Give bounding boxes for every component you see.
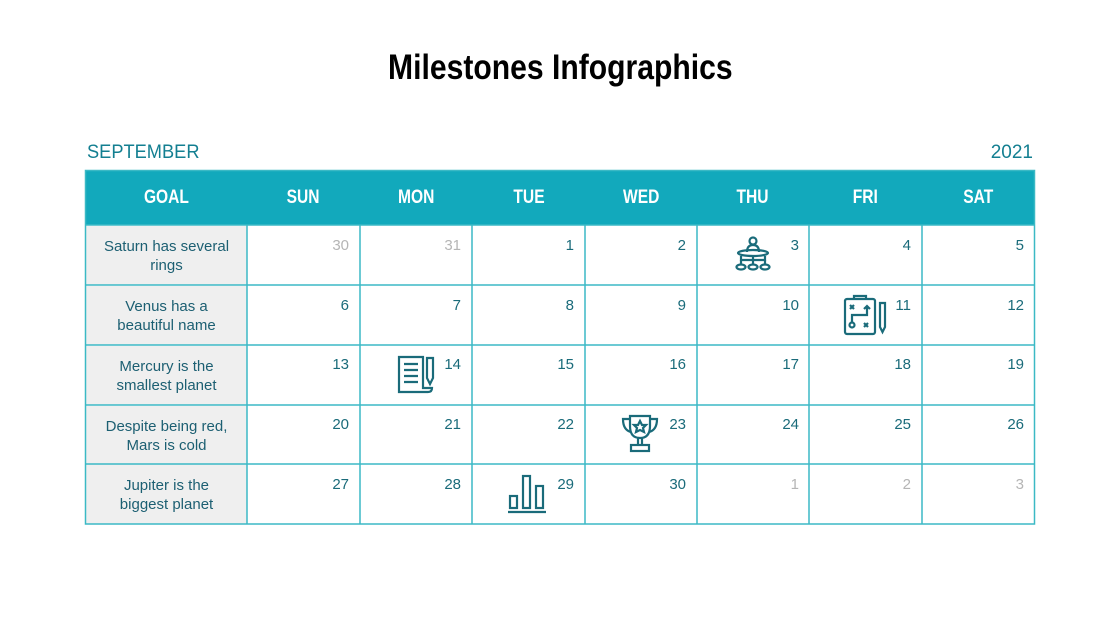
icon: network person xyxy=(735,236,771,271)
day numbers: 22 xyxy=(557,416,574,433)
goal cells: Saturn has several xyxy=(104,238,229,254)
icon: document with pen xyxy=(398,356,434,394)
day numbers: 18 xyxy=(894,356,911,373)
header labels: GOAL xyxy=(143,187,188,208)
header labels: THU xyxy=(737,187,769,208)
day numbers: 4 xyxy=(903,237,911,254)
icon: bar chart xyxy=(508,474,546,514)
goal cells xyxy=(86,226,246,523)
day numbers: 1 xyxy=(566,237,574,254)
goal cells: Mars is cold xyxy=(126,436,207,454)
day numbers: 12 xyxy=(1007,297,1024,314)
day numbers: 1 xyxy=(791,476,799,493)
day numbers: 23 xyxy=(669,416,686,433)
day numbers: 31 xyxy=(444,237,461,254)
header labels: SUN xyxy=(287,187,320,208)
day numbers: 14 xyxy=(444,356,461,373)
day numbers: 2 xyxy=(903,476,911,493)
goal cells: biggest planet xyxy=(120,496,213,512)
day numbers: 13 xyxy=(332,356,349,373)
goal cells: rings xyxy=(150,256,183,274)
day numbers: 9 xyxy=(678,297,686,314)
goal cells: Mercury is the xyxy=(119,358,214,374)
day numbers: 8 xyxy=(566,297,574,314)
year label: 2021 xyxy=(991,142,1033,163)
header labels: WED xyxy=(623,187,659,208)
day numbers: 3 xyxy=(791,237,799,254)
day numbers: 29 xyxy=(557,476,574,493)
header labels xyxy=(143,187,994,208)
day numbers: 15 xyxy=(557,356,574,373)
day numbers: 19 xyxy=(1007,356,1024,373)
day numbers: 6 xyxy=(341,297,349,314)
goal cells: Jupiter is the xyxy=(124,476,209,494)
header labels: MON xyxy=(398,187,434,208)
day numbers: 25 xyxy=(894,416,911,433)
day numbers: 7 xyxy=(453,297,461,314)
day numbers: 2 xyxy=(678,237,686,254)
day numbers: 28 xyxy=(444,476,461,493)
day numbers: 16 xyxy=(669,356,686,373)
goal cells: Despite being red, xyxy=(106,418,227,434)
icon: trophy xyxy=(622,414,658,452)
day numbers: 20 xyxy=(332,416,349,433)
day numbers: 26 xyxy=(1007,416,1024,433)
header bar xyxy=(85,170,1035,225)
day numbers: 21 xyxy=(444,416,461,433)
icon: strategy clipboard xyxy=(844,294,886,336)
day numbers: 24 xyxy=(782,416,799,433)
day numbers: 30 xyxy=(332,237,349,254)
day numbers: 3 xyxy=(1016,476,1024,493)
header labels: TUE xyxy=(513,187,544,208)
day numbers: 30 xyxy=(669,476,686,493)
goal cells: smallest planet xyxy=(116,376,217,394)
day numbers: 17 xyxy=(782,356,799,373)
day numbers: 10 xyxy=(782,297,799,314)
month label: SEPTEMBER xyxy=(87,142,200,163)
day numbers: 5 xyxy=(1016,237,1024,254)
goal cells: Venus has a xyxy=(125,298,208,314)
goal cells: beautiful name xyxy=(117,316,216,334)
day numbers: 27 xyxy=(332,476,349,493)
title: Milestones Infographics xyxy=(388,48,732,87)
header labels: FRI xyxy=(853,187,878,208)
header labels: SAT xyxy=(963,187,994,208)
day numbers: 11 xyxy=(895,297,911,314)
calendar table xyxy=(86,171,1034,224)
